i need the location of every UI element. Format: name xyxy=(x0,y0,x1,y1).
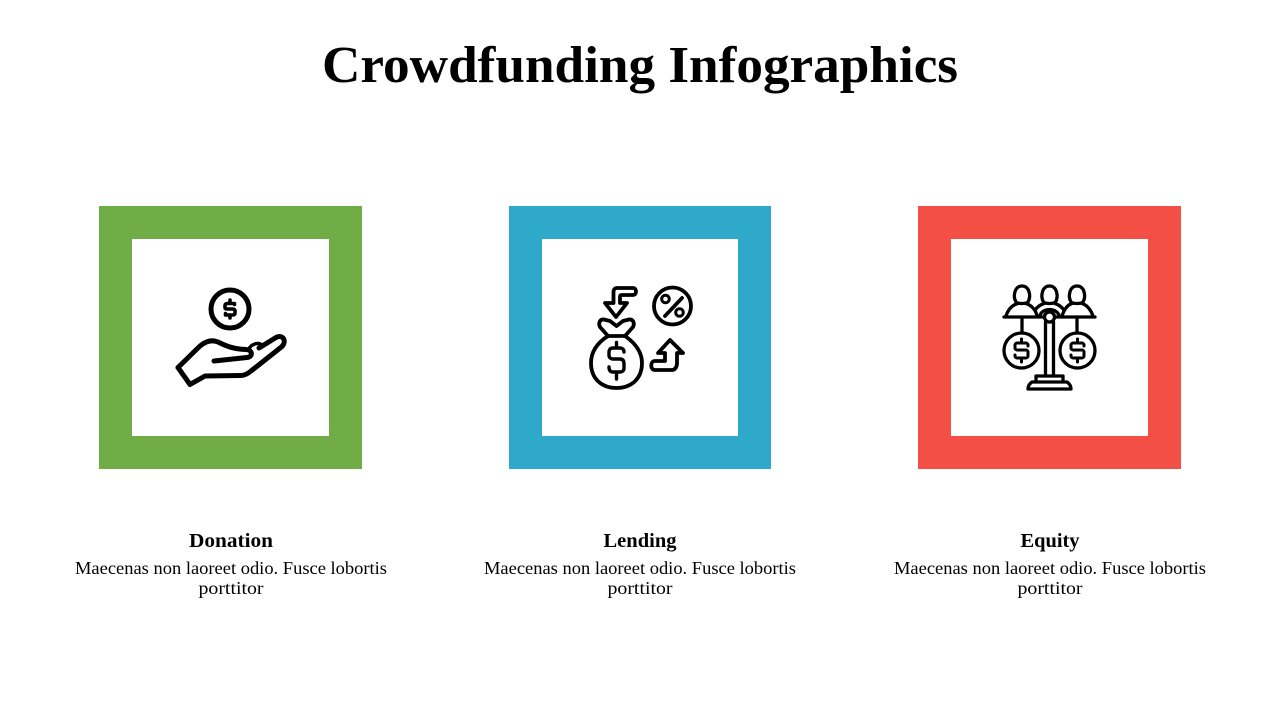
panel: lending xyxy=(484,206,796,598)
blue frame xyxy=(509,206,771,469)
description: lending: Maecenas non laoreet odio. Fusce lobortis xyxy=(484,558,796,578)
description: lending: porttitor xyxy=(608,578,673,598)
description: donation xyxy=(75,558,387,598)
title: Crowdfunding Infographics xyxy=(322,37,958,94)
red frame xyxy=(918,206,1181,469)
label: lending: Lending xyxy=(604,530,676,552)
panel: donation xyxy=(75,206,387,598)
icon: money bag with rates xyxy=(591,288,691,388)
description: lending xyxy=(484,558,796,598)
description: donation: porttitor xyxy=(198,578,264,598)
green frame xyxy=(99,206,362,469)
description: equity xyxy=(894,558,1206,598)
label: equity: Equity xyxy=(1020,530,1080,552)
description: donation: Maecenas non laoreet odio. Fusce lobortis xyxy=(75,558,387,578)
description: equity: porttitor xyxy=(1018,578,1083,598)
panel: equity xyxy=(894,206,1206,598)
icon: hand holding coin xyxy=(178,290,284,384)
description: equity: Maecenas non laoreet odio. Fusce lobortis xyxy=(894,558,1206,578)
icon: balance with people and coins xyxy=(1004,286,1095,389)
label: donation: Donation xyxy=(189,530,273,552)
